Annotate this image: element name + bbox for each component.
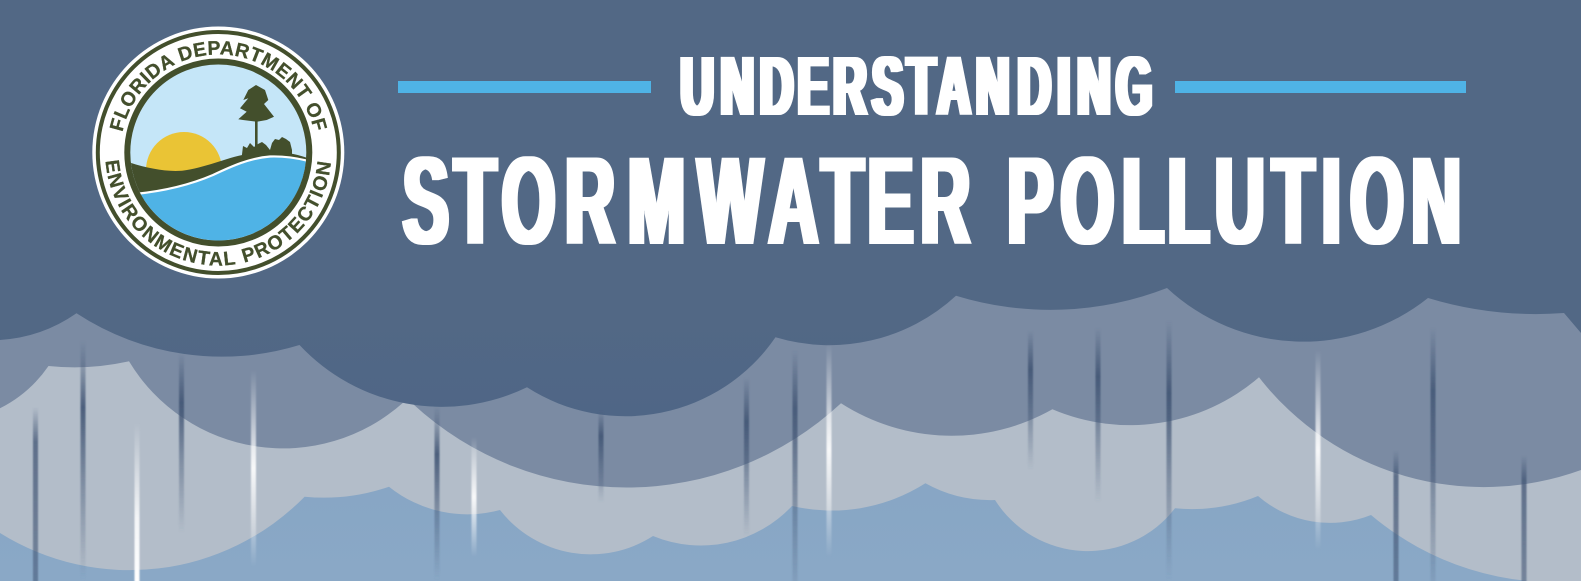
heading rule: right <box>1175 81 1466 93</box>
title line 2: STORMWATER POLLUTION <box>403 132 1461 271</box>
logo scene: sun, land, water, tree <box>131 85 306 240</box>
title line 1: UNDERSTANDING <box>681 41 1152 134</box>
cloud layer: dark top <box>0 0 1581 416</box>
rain streaks <box>33 320 1526 581</box>
logo text: top arc: FLORIDA DEPARTMENT OF <box>110 41 328 132</box>
logo text: bottom arc: ENVIRONMENTAL PROTECTION <box>105 160 331 266</box>
logo: Florida Department of Environmental Protection seal <box>92 26 344 278</box>
heading rule: left <box>398 81 651 93</box>
